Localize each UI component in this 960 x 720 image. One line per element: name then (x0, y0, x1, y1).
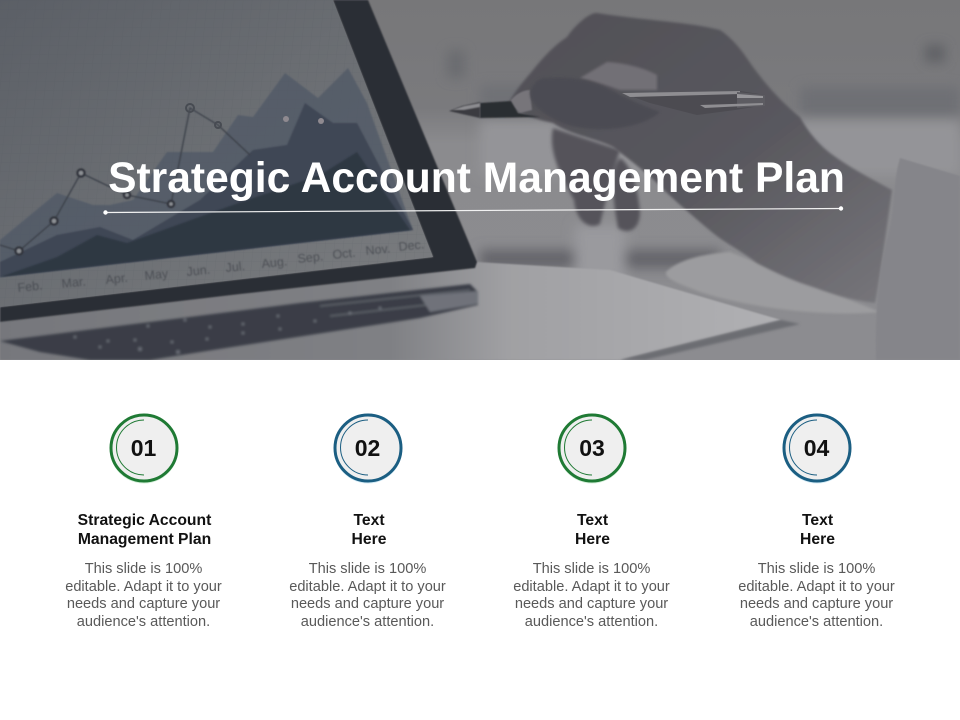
column 3 (558, 414, 626, 484)
text 3: needs and capture your (515, 596, 668, 612)
icon: number badge 02 (334, 414, 402, 484)
title underline (103, 206, 844, 215)
heading 3 (575, 512, 610, 548)
hand (509, 13, 892, 303)
screen month labels: Jun. (186, 263, 211, 279)
screen month labels: Dec. (398, 237, 425, 254)
screen month labels: Feb. (17, 278, 43, 295)
number 04: 04 (804, 435, 829, 461)
title: Strategic Account Management Plan (108, 154, 845, 202)
number 03: 03 (579, 435, 605, 461)
text 1: audience's attention. (77, 614, 210, 630)
heading 3: Text (577, 512, 608, 529)
heading 2: Here (352, 531, 386, 548)
text 2 (289, 561, 446, 630)
icon: number badge 03 (558, 414, 626, 484)
number 02: 02 (355, 435, 380, 461)
heading 4: Text (802, 512, 833, 529)
laptop base (0, 262, 781, 360)
sleeve (876, 158, 960, 360)
text 4: editable. Adapt it to your (738, 579, 895, 595)
text 3: editable. Adapt it to your (513, 579, 670, 595)
fingers behind (552, 128, 640, 231)
heading 3: Here (575, 531, 610, 548)
screen month labels: Mar. (61, 275, 86, 291)
heading 2: Text (353, 512, 385, 529)
icon: number badge 01 (110, 414, 178, 484)
screen month labels: Apr. (105, 271, 128, 287)
text 4: This slide is 100% (758, 561, 875, 577)
text 1: editable. Adapt it to your (65, 579, 222, 595)
column 4 (782, 414, 852, 484)
gap between finger and thumb (580, 62, 657, 90)
pen (449, 91, 765, 118)
text 1: needs and capture your (67, 596, 220, 612)
text 2: needs and capture your (291, 596, 444, 612)
heading 2 (352, 512, 386, 548)
column 2 (334, 414, 402, 484)
laptop bezel (0, 0, 477, 322)
screen month labels: Nov. (365, 241, 391, 258)
text 4: needs and capture your (740, 596, 893, 612)
thumb (530, 77, 660, 129)
screen month labels: Jul. (225, 259, 246, 275)
screen month labels: Aug. (261, 254, 288, 271)
text 3: This slide is 100% (533, 561, 650, 577)
laptop screen (0, 0, 433, 307)
heading 1: Strategic Account (78, 512, 211, 529)
fingertip (509, 90, 532, 113)
text 4 (738, 561, 895, 630)
screen month labels: Sep. (297, 249, 324, 266)
icon: number badge 04 (782, 414, 852, 484)
screen month labels (17, 237, 425, 295)
text 2: editable. Adapt it to your (289, 579, 446, 595)
text 1 (65, 561, 222, 630)
heading 1 (78, 512, 212, 548)
screen month labels: May (144, 267, 170, 283)
heading 4 (800, 512, 835, 548)
text 3 (513, 561, 670, 630)
keyboard (0, 284, 478, 360)
screen chart (0, 68, 413, 277)
text 2: This slide is 100% (309, 561, 426, 577)
text 2: audience's attention. (301, 614, 434, 630)
number 01: 01 (131, 435, 156, 461)
text 4: audience's attention. (750, 614, 883, 630)
screen month labels: Oct. (332, 246, 356, 262)
heading 1: Management Plan (78, 531, 211, 548)
hero photo: laptop and hand with pen (0, 0, 960, 360)
saucer (666, 252, 880, 313)
text 3: audience's attention. (525, 614, 658, 630)
column 1 (110, 414, 178, 484)
heading 4: Here (800, 531, 835, 548)
text 1: This slide is 100% (85, 561, 202, 577)
